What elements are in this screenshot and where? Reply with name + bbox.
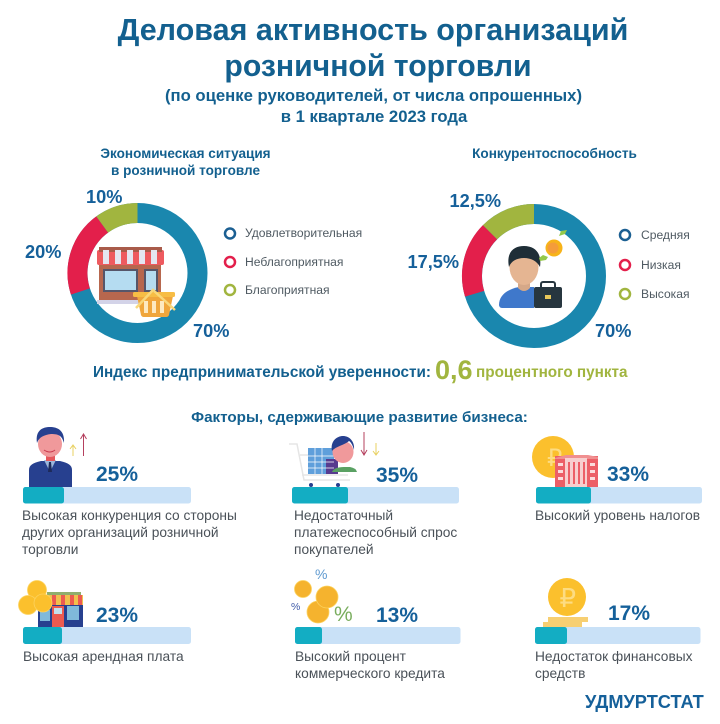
- factor: rent: [18, 580, 191, 664]
- description: [294, 508, 457, 557]
- icon: manager with briefcase: [499, 230, 567, 308]
- value: 17%: [608, 602, 650, 625]
- icon: coin stack: ₽: [560, 583, 576, 613]
- description: [22, 508, 237, 557]
- percent labels: 10%: [86, 187, 122, 207]
- description: Высокая арендная плата: [23, 649, 184, 664]
- donut chart: economic situation: [77, 213, 198, 333]
- heading: factors: Факторы, сдерживающие развитие бизнеса:: [191, 409, 528, 426]
- legend: Неблагоприятная: [245, 255, 343, 269]
- factor: competition: [22, 427, 237, 557]
- percent labels: 17,5%: [408, 252, 459, 272]
- confidence index: [93, 355, 628, 385]
- factor: credit: [291, 566, 460, 681]
- icon: shopping cart with buyer and down arrows: [289, 432, 379, 487]
- donut chart: competitiveness: [472, 214, 596, 338]
- value: 25%: [96, 463, 138, 486]
- icon: coins and percent signs: %: [315, 566, 327, 582]
- percent labels: 70%: [193, 321, 229, 341]
- legend: Низкая: [641, 258, 681, 272]
- legend: [620, 228, 690, 301]
- progress bar: [295, 627, 460, 644]
- progress bar: [23, 627, 191, 644]
- description: Высокий процент: [295, 649, 407, 664]
- description: средств: [535, 666, 585, 681]
- percent labels: [408, 191, 631, 341]
- legend: Средняя: [641, 228, 690, 242]
- legend: Удовлетворительная: [245, 226, 362, 240]
- icon: businessman with up arrows: [29, 427, 86, 487]
- description: Высокая конкуренция со стороны: [22, 508, 237, 523]
- description: других организаций розничной: [22, 525, 219, 540]
- confidence index: 0,6: [435, 355, 473, 385]
- factor: taxes: [532, 436, 702, 523]
- factor: lack of funds: [535, 578, 700, 681]
- legend: Благоприятная: [245, 283, 330, 297]
- progress bar: [536, 487, 702, 504]
- description: [295, 649, 445, 681]
- legend: [225, 226, 362, 297]
- percent labels: [25, 187, 229, 341]
- icon: shop with coins: [18, 580, 83, 627]
- icon: coin and tax building: ₽: [547, 445, 562, 472]
- panel: economic situation: [25, 146, 362, 341]
- percent labels: 70%: [595, 321, 631, 341]
- description: коммерческого кредита: [295, 666, 445, 681]
- description: торговли: [22, 542, 78, 557]
- percent labels: 12,5%: [450, 191, 501, 211]
- title: розничной торговли: [224, 50, 532, 83]
- source: Udmurtstat: УДМУРТСТАТ: [585, 692, 704, 712]
- value: 33%: [607, 463, 649, 486]
- progress bar: [23, 487, 191, 504]
- heading: competitiveness: Конкурентоспособность: [472, 146, 637, 161]
- factor: demand: [289, 432, 459, 557]
- icon: shop with basket: [97, 247, 175, 317]
- description: платежеспособный спрос: [294, 525, 457, 540]
- title: (по оценке руководителей, от числа опрошенных): [165, 86, 582, 105]
- confidence index: Индекс предпринимательской уверенности:: [93, 364, 431, 381]
- description: Высокий уровень налогов: [535, 508, 700, 523]
- description: [535, 649, 693, 681]
- description: Недостаточный: [294, 508, 393, 523]
- value: 13%: [376, 604, 418, 627]
- heading: economic situation: Экономическая ситуация: [100, 146, 271, 161]
- value: 35%: [376, 464, 418, 487]
- progress bar: [535, 627, 700, 644]
- title: Деловая активность организаций: [118, 13, 628, 47]
- heading: economic situation: [100, 146, 271, 178]
- description: Недостаток финансовых: [535, 649, 693, 664]
- icon: coin stack: [543, 578, 588, 627]
- title: в 1 квартале 2023 года: [281, 107, 468, 126]
- icon: coins and percent signs: %: [291, 601, 300, 613]
- value: 23%: [96, 604, 138, 627]
- legend: Высокая: [641, 287, 690, 301]
- progress bar: [292, 487, 459, 504]
- percent labels: 20%: [25, 242, 61, 262]
- panel: competitiveness: [408, 146, 690, 341]
- description: покупателей: [294, 542, 374, 557]
- confidence index: процентного пункта: [476, 364, 628, 381]
- icon: coin and tax building: [532, 436, 598, 487]
- heading: economic situation: в розничной торговле: [111, 163, 260, 178]
- title: [118, 13, 628, 126]
- icon: coins and percent signs: [291, 566, 353, 626]
- icon: coins and percent signs: %: [334, 603, 353, 626]
